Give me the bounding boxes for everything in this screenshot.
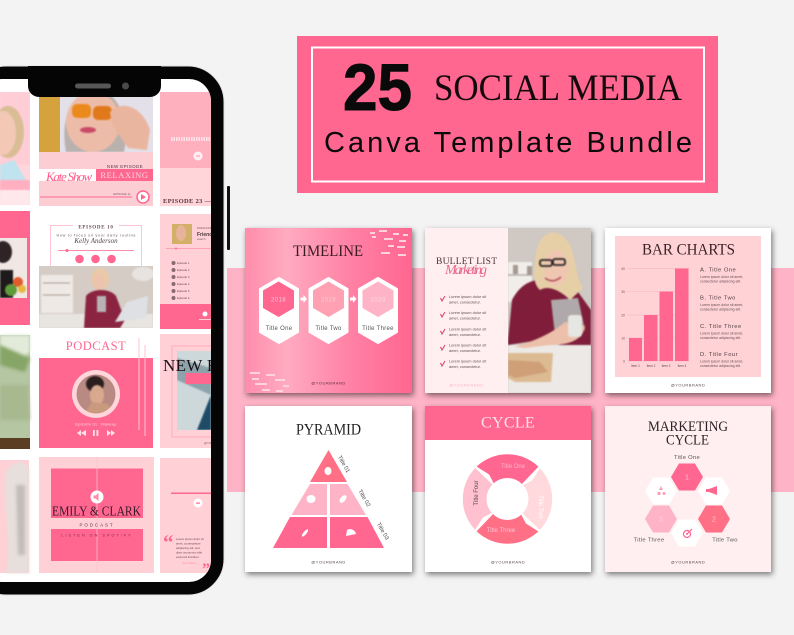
post: quote: Lorem ipsum dolor sit [176,537,204,541]
hexagon diagram: 1 [685,474,689,482]
title: MARKETING [648,419,728,435]
bullet items: amet, consectetur. [449,316,481,320]
bullet items: amet, consectetur. [449,332,481,337]
card: bar charts [605,228,771,393]
bar chart: Item 1 [631,364,640,368]
legend text: Lorem ipsum dolor sit amet, [700,332,743,336]
subheading: Canva Template Bundle [324,127,692,159]
legend text: consectetur adipiscing elit. [700,364,741,368]
post: quote: euismod tincidunt [176,555,199,559]
post: podcast: PODCAST [66,339,126,353]
bar chart: 20 [621,314,625,318]
post: episode list: Episode 4 [177,282,190,286]
bar chart: Item 3 [662,364,671,368]
post: new episode relaxing: RELAXING [100,170,149,180]
post: episode list: Episode 2 [177,268,190,272]
post: new episode relaxing: NEW EPISODE [107,164,143,169]
bullet items: Lorem ipsum dolor sit [449,342,487,348]
post: podcast [39,338,153,448]
legend text: Lorem ipsum dolor sit amet, [700,360,743,364]
photo: woman at desk [508,228,591,393]
post: quote [160,458,211,578]
bullet items [440,294,487,369]
hexagon diagram: Title Two [712,538,738,544]
post: portrait blonde [0,92,30,205]
post: podcast: Episode 01 : Makeup [75,422,117,426]
arrow [350,295,356,303]
step: 2019: Title Two [315,326,342,332]
post: emily and clark: EMILY & CLARK [52,504,141,520]
legend text [700,268,743,368]
post: episode list: Episode 3 [177,275,190,279]
step: 2018: Title One [266,326,293,332]
post: emily and clark [39,457,154,573]
post: hot pink portrait [0,211,30,325]
legend text: consectetur adipiscing elit. [700,280,741,284]
pyramid chart: Title 01 [336,455,350,474]
legend text: B. Title Two [700,296,736,302]
step: 2020 [359,278,397,343]
title: CYCLE [666,432,709,448]
bullet items: amet, consectetur. [449,300,481,304]
post: new feature: NEW F [163,356,217,375]
pink background band [227,268,794,492]
post: episode list: Episode 5 [177,289,190,293]
post: episode 10: Kelly Anderson [73,237,118,245]
post: fur photo [0,460,29,573]
post: palm photo [0,335,30,449]
step: 2019 [310,278,348,343]
card: marketing cycle [605,406,771,572]
timeline decorative dashes [250,230,408,392]
number 25: 25 [343,50,412,124]
bullet items: amet, consectetur. [449,364,481,369]
card: timeline [245,228,412,393]
bar chart [621,267,689,368]
cycle ring chart [462,454,553,544]
brand handle: @YOURBRAND [671,560,705,564]
phone screen content [0,90,217,578]
post: quote: ” [202,561,210,578]
brand handle: @YOURBRAND [449,382,484,388]
bar chart: 0 [623,360,625,364]
hexagon diagram [634,455,738,546]
pyramid chart: Title 03 [375,522,389,541]
step: 2020: 2020 [371,298,386,304]
cycle ring chart: Title Four [474,480,480,506]
script subheading: Marketing [444,263,487,278]
legend text: Lorem ipsum dolor sit amet, [700,303,743,307]
title: TIMELINE [293,243,363,260]
step: 2018 [260,278,298,343]
header banner [297,36,718,193]
post: new feature: @YOU [204,441,214,445]
hexagon diagram: Title One [674,455,700,461]
bar chart: Item 4 [678,364,687,368]
brand handle: @YOURBRAND [311,380,346,386]
post: episode list: search [197,237,206,241]
bar chart: 30 [621,290,625,294]
legend text: C. Title Three [700,324,742,330]
post: episode 10: How to focus on your daily routine [56,234,136,238]
post: episode list: PODCAST [197,226,212,230]
heading: BULLET LIST [436,257,497,267]
post: episode 10: EPISODE 10 [78,226,114,230]
brand handle: @YOURBRAND [671,382,705,388]
post: episode list: Episode 1 [177,261,190,265]
post: quote: diam nonummy nibh [176,550,202,554]
post: episode 23 [160,92,212,206]
post: new episode relaxing: EPISODE 11 [113,192,131,196]
post: episode list: Friends [197,232,215,238]
post: quote: Your Name [182,561,197,565]
legend text: consectetur adipiscing elit. [700,308,741,312]
cycle ring chart: Title Three [487,528,516,534]
post: new episode relaxing [39,90,153,206]
title: PYRAMID [296,422,361,438]
arrow [300,295,307,303]
post: episode list [160,214,215,329]
card: cycle [425,406,591,572]
post: quote: adipiscing elit, sed [176,546,200,550]
legend text: consectetur adipiscing elit. [700,336,741,340]
phone notch [28,66,161,97]
bullet items: Lorem ipsum dolor sit [449,310,487,315]
bullet items: amet, consectetur. [449,348,481,353]
hexagon diagram: 2 [712,516,716,524]
post: quote: amet, consectetuer [176,542,201,546]
title [648,419,728,448]
bar chart: 40 [621,267,625,271]
cycle ring chart: Title One [501,464,526,470]
hexagon diagram: Title Three [634,538,664,544]
pyramid chart [273,450,389,548]
legend text: A. Title One [700,268,736,274]
post: new episode relaxing: Kate Show [45,169,92,184]
step: 2018: 2018 [271,298,286,304]
step: 2020: Title Three [362,326,394,332]
post: emily and clark: LISTEN ON SPOTIFY [61,534,133,538]
card: bullet list [425,228,591,393]
bullet items: Lorem ipsum dolor sit [449,326,487,332]
legend text: Lorem ipsum dolor sit amet, [700,275,743,279]
pyramid chart: Title 02 [356,489,371,508]
bullet items: Lorem ipsum dolor sit [449,294,487,299]
post: episode 23: EPISODE 23 — [163,198,212,205]
side button [227,186,230,250]
title: CYCLE [481,414,535,432]
post: quote: “ [163,530,174,554]
legend text: D. Title Four [700,352,738,358]
phone mockup [0,66,230,595]
brand handle: @YOURBRAND [491,560,525,564]
title: BAR CHARTS [642,242,735,258]
step: 2019: 2019 [321,298,336,304]
post: emily and clark: PODCAST [79,522,115,528]
card: pyramid [245,406,412,572]
bullet items: Lorem ipsum dolor sit [449,358,487,364]
bar chart: Item 2 [647,364,656,368]
post: episode 10 [39,222,154,328]
post: episode list: Episode 6 [177,296,190,300]
brand handle: @YOURBRAND [311,560,346,564]
post: new feature [160,334,211,448]
heading: social media: SOCIAL MEDIA [434,68,682,109]
bar chart: 10 [621,336,625,340]
cycle ring chart: Title Two [537,495,543,519]
hexagon diagram: 3 [659,516,663,524]
